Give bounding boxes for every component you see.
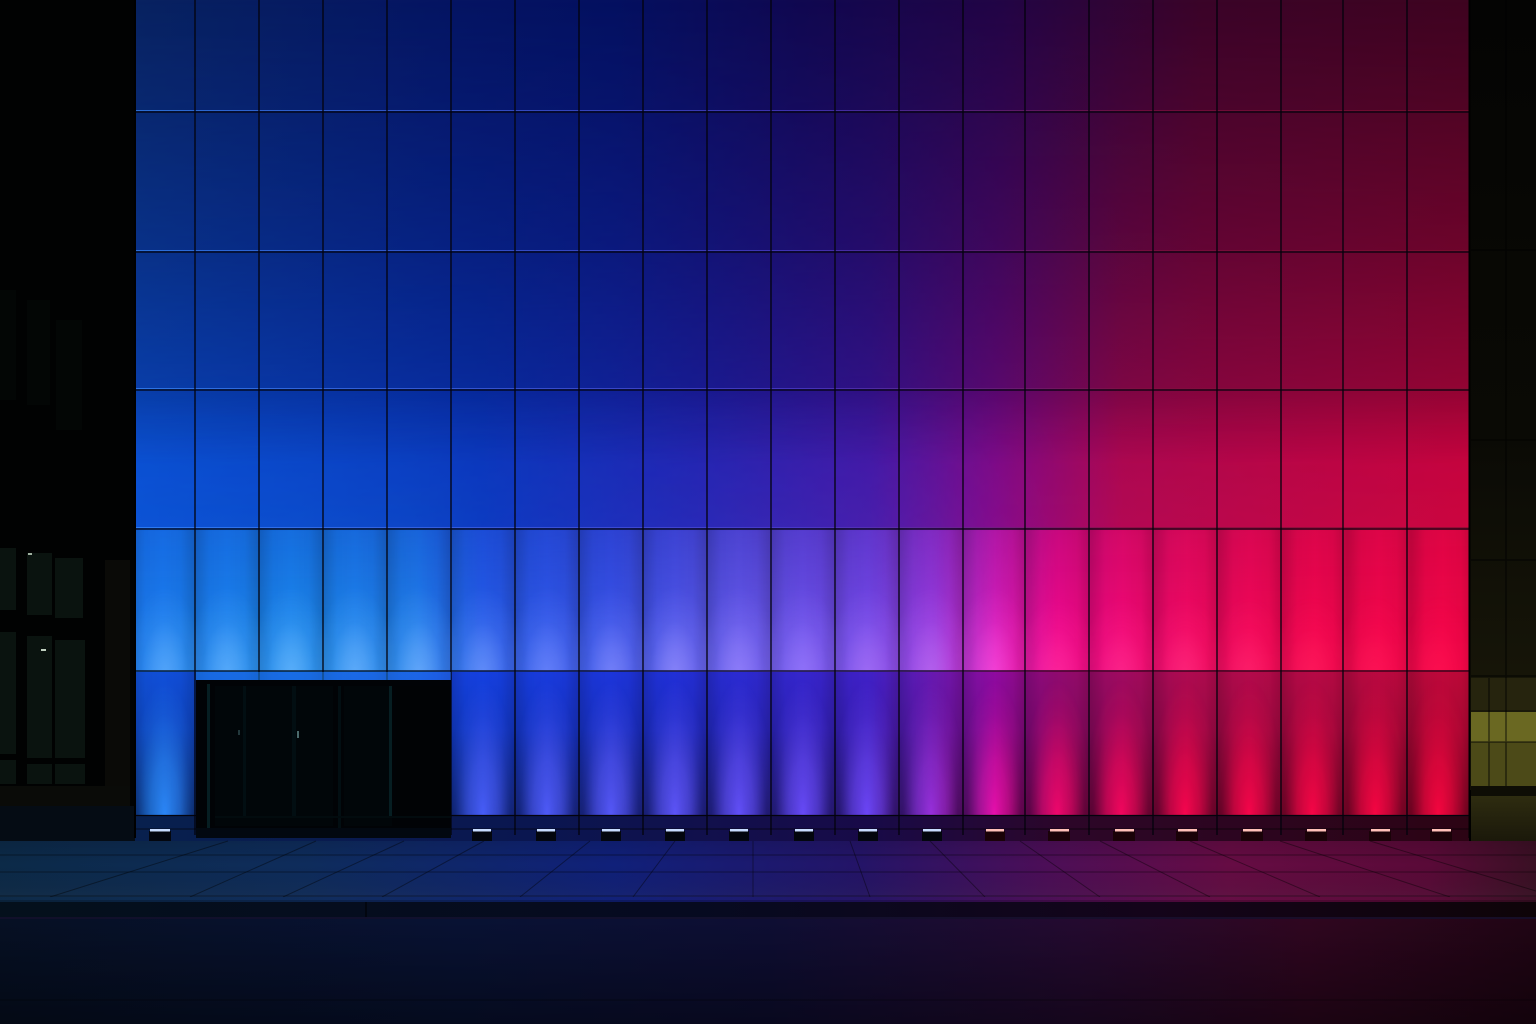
pavement: [0, 841, 1536, 900]
door canopy: [196, 672, 451, 680]
right neighbouring building: [1469, 0, 1536, 842]
facade wall with colour gradient: [135, 0, 1469, 841]
curb: [0, 897, 1536, 917]
lower panel band: [135, 672, 1469, 815]
lower uplight glows: [136, 693, 1468, 815]
upper uplight glows: [136, 606, 1440, 670]
floor light fixtures: [149, 829, 1452, 841]
road: [0, 917, 1536, 1024]
base strip: [135, 815, 1469, 841]
entrance door: [196, 672, 451, 838]
lower windows: [0, 548, 85, 784]
left neighbouring building: [0, 0, 135, 841]
panel grid lines: [135, 0, 1470, 838]
